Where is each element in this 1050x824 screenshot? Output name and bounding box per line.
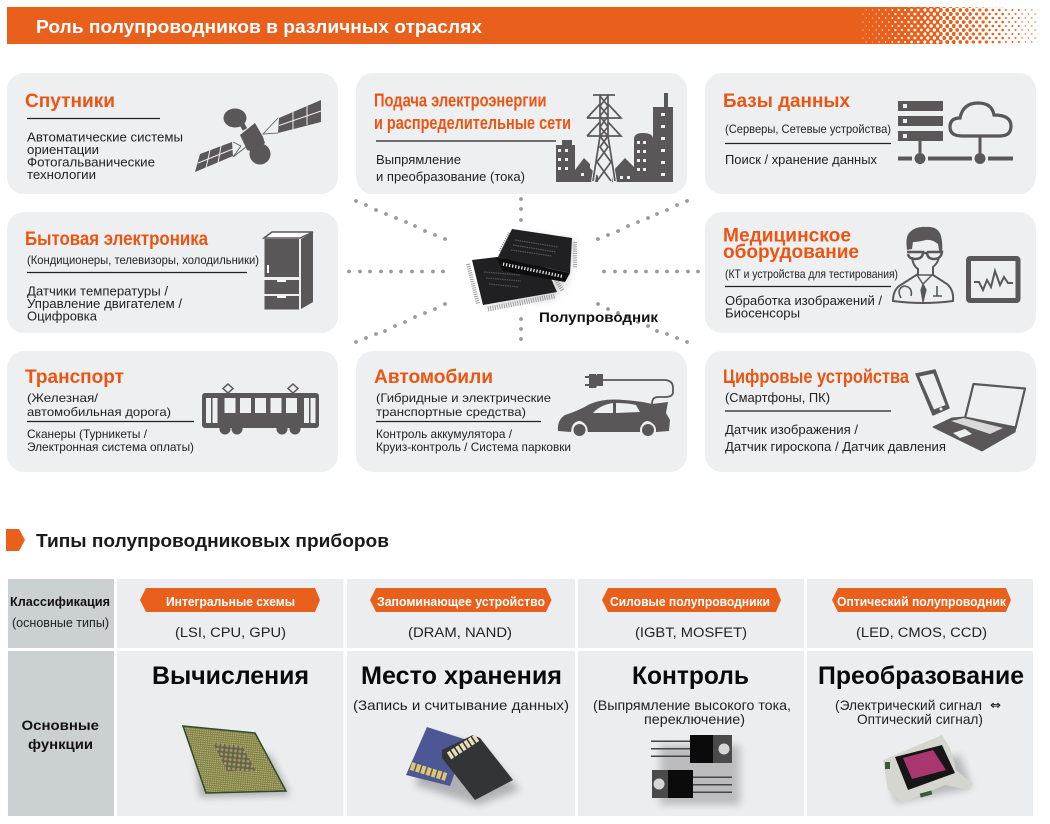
panel: medical equipment: Медицинское [723,226,851,246]
panel: transport: автомобильная дорога) [27,405,171,419]
panel: data centers [705,73,1036,194]
connector dots [347,197,700,344]
column: optical semiconductors [807,579,1033,816]
panel: automobiles: (Гибридные и электрические [376,391,551,405]
panel: digital devices: (Смартфоны, ПК) [725,391,830,405]
panel: home electronics [7,212,338,333]
panel: satellites: Спутники [25,91,115,112]
panel: home electronics: Управление двигателем / [27,297,183,311]
column: integrated circuits [117,579,344,816]
column: integrated circuits: Вычисления [152,662,309,690]
column: integrated circuits: Интегральные схемы [166,595,295,609]
panel: digital devices [705,351,1036,472]
row labels [8,579,114,816]
panel: automobiles: Круиз-контроль / Система парковки [376,440,571,454]
panel: data centers: Базы данных [723,91,850,112]
panel: home electronics: Датчики температуры / [27,284,169,298]
header title: Роль полупроводников в различных отраслях [36,16,483,37]
column: optical semiconductors: Оптический полупроводник [837,595,1007,609]
heading marker [6,529,25,551]
column: power semiconductors: Контроль [632,662,749,690]
column: optical semiconductors: Оптический сигнал) [857,711,983,727]
image: image sensor [883,735,972,803]
row labels: (основные типы) [12,616,109,630]
panel: medical equipment: оборудование [723,242,859,263]
column: power semiconductors [578,579,804,816]
column: integrated circuits: (LSI, CPU, GPU) [175,625,286,640]
semiconductor label: Полупроводник [539,310,658,325]
panel: power supply and distribution [356,73,687,194]
panel: satellites: Фотогальванические [27,156,155,170]
image: transistors [651,735,740,805]
icon: laptop [933,384,1025,451]
panel: satellites: ориентации [27,143,99,157]
panel: digital devices: Датчик гироскопа / Датчик давления [725,440,946,454]
panel: home electronics: (Кондиционеры, телевизоры, холодильники) [27,253,259,267]
column: optical semiconductors: Преобразование [818,662,1024,690]
column: power semiconductors: переключение) [644,711,745,727]
column: memory [347,579,575,816]
panel: home electronics: Оцифровка [27,310,97,324]
image: CPU [183,726,290,797]
panel: medical equipment: Обработка изображений / [725,294,883,308]
panel: automobiles: Контроль аккумулятора / [376,427,513,441]
panel: transport: Транспорт [25,367,124,388]
column: power semiconductors: (IGBT, MOSFET) [635,625,747,640]
panel: transport: Электронная система оплаты) [27,440,194,454]
column: power semiconductors: (Выпрямление высокого тока, [593,697,791,713]
panel: satellites: технологии [27,168,96,182]
icon: satellite [195,100,321,172]
column: optical semiconductors: (Электрический сигнал [835,697,982,713]
icon: pylon and city [556,93,673,182]
panel: data centers: (Серверы, Сетевые устройства) [725,122,891,136]
panel: digital devices: Датчик изображения / [725,423,859,437]
panel: transport [7,351,338,472]
panel: automobiles [356,351,687,472]
icon: servers and cloud [898,101,1013,164]
panel: transport: Сканеры (Турникеты / [27,427,148,441]
panel: automobiles: транспортные средства) [376,405,526,419]
section heading: device types: Типы полупроводниковых приборов [36,531,389,551]
column: memory: (DRAM, NAND) [408,625,512,640]
icon: smartphone [916,370,949,415]
panel: automobiles: Автомобили [374,367,493,388]
icon: monitor [968,258,1018,300]
central semiconductor chips [468,229,577,309]
column: memory: Запоминающее устройство [377,595,545,609]
panel: power supply and distribution: Подача электроэнергии [374,90,546,110]
panel: medical equipment [705,212,1036,333]
panel: satellites: Автоматические системы [27,130,183,144]
badge [370,588,552,612]
table of semiconductor types [8,579,1033,816]
row labels: Классификация [10,595,110,609]
panel: digital devices: Цифровые устройства [723,367,909,388]
icon: tram [202,384,319,434]
header banner [7,7,1038,44]
column: optical semiconductors: (LED, CMOS, CCD) [856,625,987,640]
column: memory: (Запись и считывание данных) [353,697,569,713]
panel: satellites [7,73,338,194]
row labels: функции [28,736,93,752]
badge [602,588,781,612]
panel: home electronics: Бытовая электроника [25,229,208,250]
panel: data centers: Поиск / хранение данных [725,153,878,167]
icon: doctor [893,227,953,303]
upper chip [496,229,575,282]
panel: power supply and distribution: Выпрямление [376,153,461,167]
badge [832,588,1011,612]
badge [140,588,320,612]
panel: power supply and distribution: и распределительные сети [374,113,571,133]
panel: medical equipment: (КТ и устройства для тестирования) [725,267,898,281]
column: power semiconductors: Силовые полупроводники [610,595,770,609]
icon: refrigerator [264,232,313,310]
lower chip [468,257,563,309]
row labels: Основные [22,717,99,733]
image: memory cards [406,727,520,805]
panel: power supply and distribution: и преобразование (тока) [376,170,525,184]
panel: medical equipment: Биосенсоры [725,306,800,320]
column: optical semiconductors: ⇔ [990,698,1001,712]
icon: electric car [558,374,673,438]
column: memory: Место хранения [361,662,562,690]
panel: transport: (Железная/ [27,391,99,405]
